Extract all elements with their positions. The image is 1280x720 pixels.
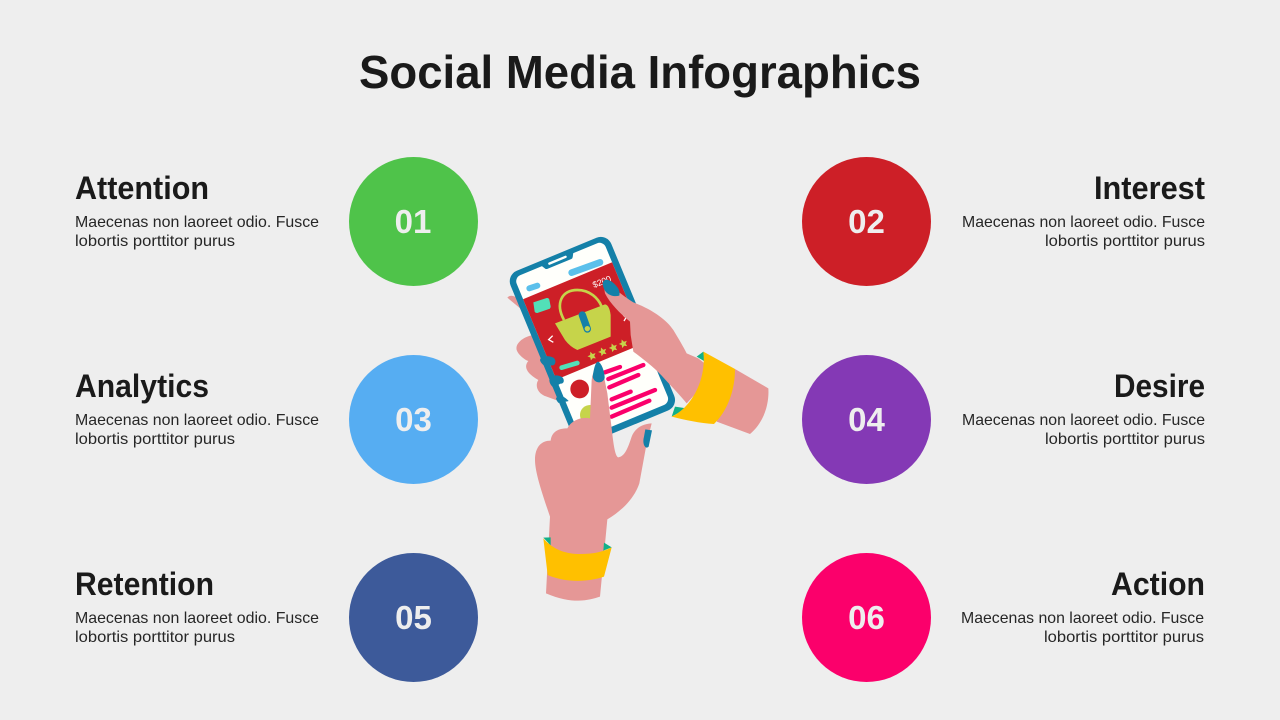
- number circle 04: [802, 355, 931, 484]
- heading: Interest: Interest: [1094, 170, 1205, 206]
- text block: Desire description: Maecenas non laoreet odio. Fusce: [962, 412, 1205, 429]
- text block: Action description: lobortis porttitor purus: [1044, 629, 1204, 646]
- text block: Attention description: [75, 214, 319, 250]
- right thumb nail: [603, 280, 620, 296]
- thumb nail: [643, 429, 652, 448]
- number circle 01: 01: [395, 203, 431, 240]
- panel: 03 Analytics: [75, 355, 478, 484]
- text block: Action description: [961, 610, 1204, 646]
- panel: 01 Attention: [75, 157, 478, 286]
- text block: Analytics description: [75, 412, 319, 448]
- panel: 02 Interest: [802, 157, 1205, 286]
- panel: 04 Desire: [802, 355, 1205, 484]
- number circle 05: [349, 553, 478, 682]
- pointing hand and cuff: [535, 362, 652, 601]
- title: Social Media Infographics: [359, 46, 921, 98]
- text block: Retention description: lobortis porttitor purus: [75, 629, 235, 646]
- text block: Action description: Maecenas non laoreet odio. Fusce: [961, 610, 1204, 627]
- text block: Attention description: Maecenas non laoreet odio. Fusce: [75, 214, 319, 231]
- panel: 06 Action: [802, 553, 1205, 682]
- number circle 03: [349, 355, 478, 484]
- left hand fingernails: [540, 356, 569, 403]
- number circle 05: 05: [395, 599, 432, 636]
- text block: Interest description: lobortis porttitor purus: [1045, 233, 1205, 250]
- text block: Desire description: lobortis porttitor purus: [1045, 431, 1205, 448]
- pointing finger nail: [593, 362, 605, 382]
- text block: Desire description: [962, 412, 1205, 448]
- right hand, forearm and cuff: [603, 280, 768, 434]
- number circle 03: 03: [395, 401, 432, 438]
- heading: Attention: Attention: [75, 170, 209, 206]
- phone screen content: $200: [591, 273, 613, 290]
- phone screen content: [529, 262, 655, 425]
- heading: Action: Action: [1111, 566, 1205, 602]
- text block: Analytics description: lobortis porttitor purus: [75, 431, 235, 448]
- left hand behind phone: [507, 296, 572, 403]
- text block: Analytics description: Maecenas non laoreet odio. Fusce: [75, 412, 319, 429]
- text block: Retention description: Maecenas non laoreet odio. Fusce: [75, 610, 319, 627]
- heading: Analytics: Analytics: [75, 368, 209, 404]
- number circle 06: 06: [848, 599, 885, 636]
- text block: Interest description: Maecenas non laoreet odio. Fusce: [962, 214, 1205, 231]
- number circle 02: 02: [848, 203, 885, 240]
- text block: Attention description: lobortis porttitor purus: [75, 233, 235, 250]
- panel: 05 Retention: [75, 553, 478, 682]
- number circle 01: [349, 157, 478, 286]
- text block: Interest description: [962, 214, 1205, 250]
- number circle 02: [802, 157, 931, 286]
- heading: Retention: Retention: [75, 566, 214, 602]
- illustration: hands holding a smartphone: [506, 233, 768, 601]
- number circle 04: 04: [848, 401, 885, 438]
- smartphone: [510, 236, 676, 434]
- text block: Retention description: [75, 610, 319, 646]
- number circle 06: [802, 553, 931, 682]
- heading: Desire: Desire: [1114, 368, 1205, 404]
